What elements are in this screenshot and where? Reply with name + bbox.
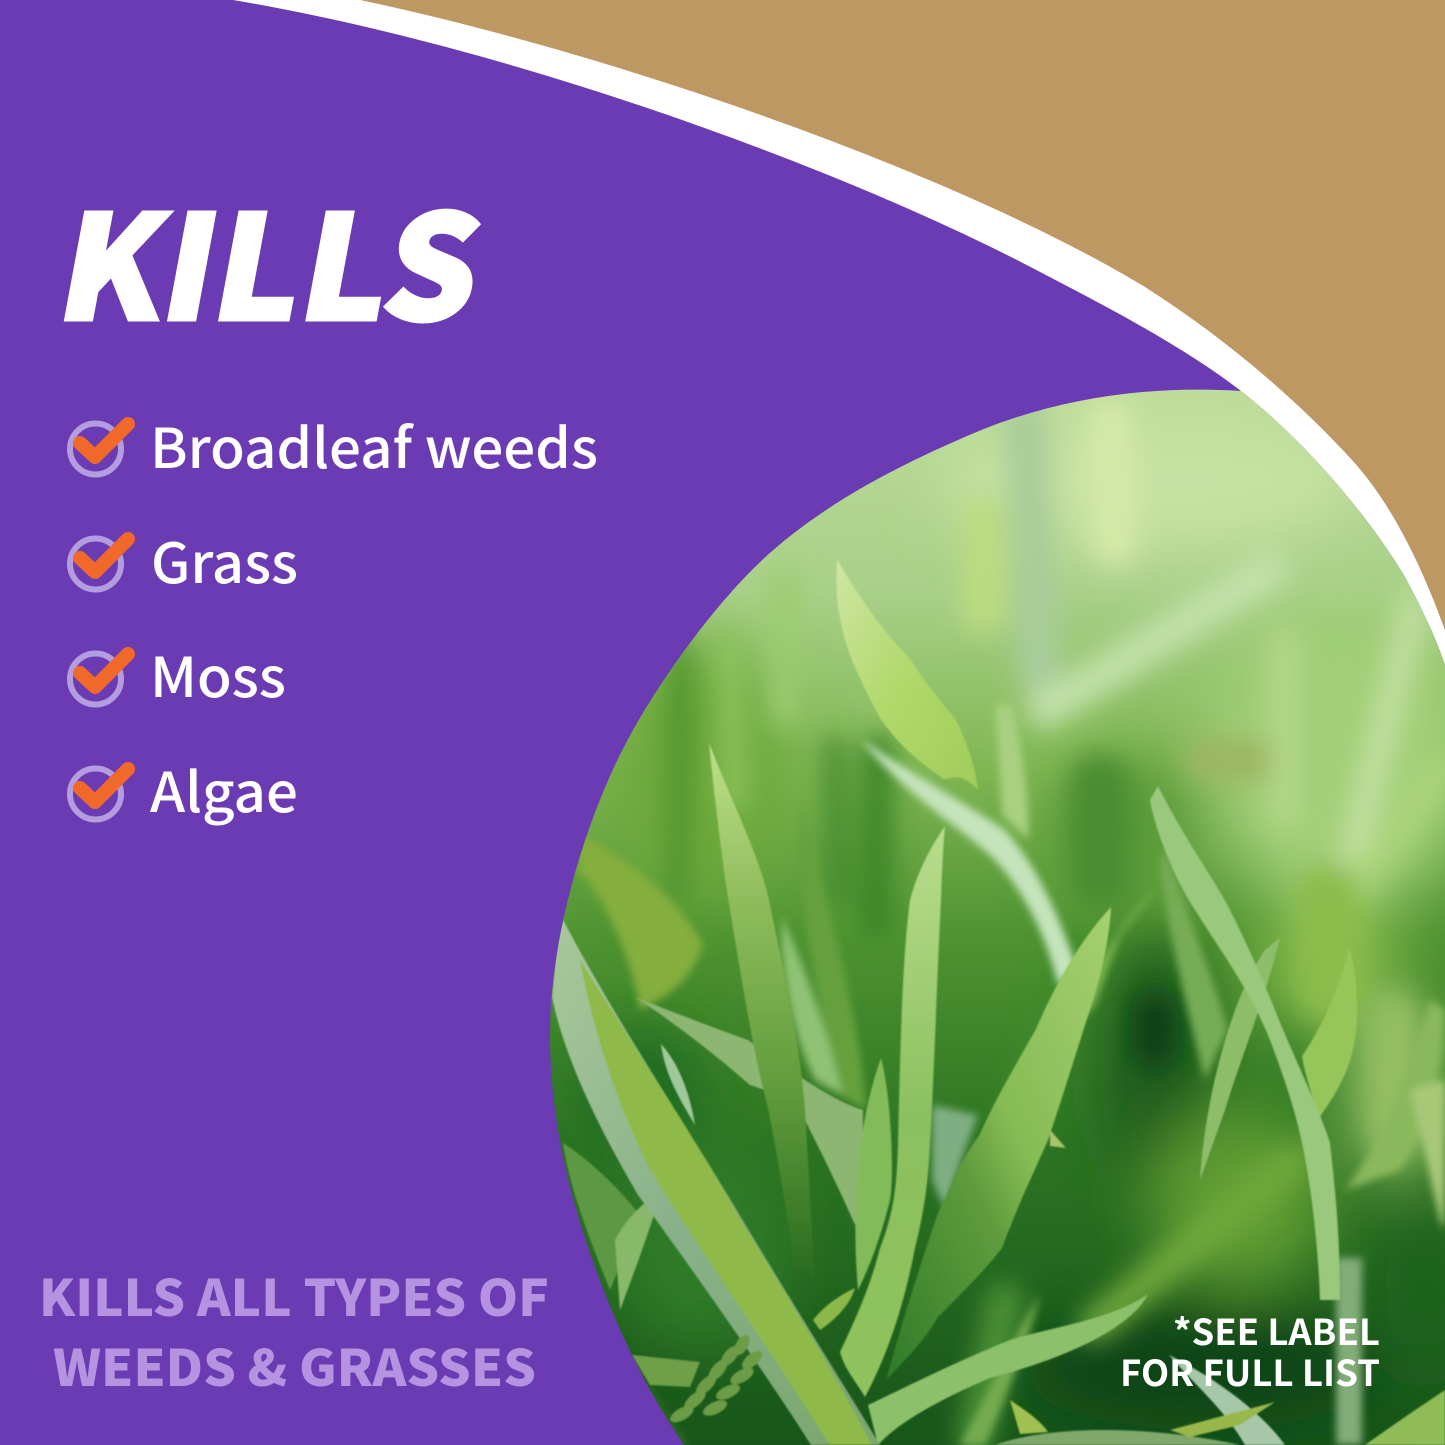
- blade thin E: [1150, 786, 1340, 1300]
- seed head: [632, 1332, 765, 1426]
- item: grass: Grass: [151, 519, 298, 599]
- small left blades: [563, 1143, 640, 1290]
- blade small right: [1302, 947, 1357, 1118]
- white swoosh band: [233, 0, 1445, 665]
- item: broadleaf weeds: Broadleaf weeds: [150, 404, 598, 484]
- item: algae: [70, 748, 298, 828]
- grass photo circle: [540, 380, 1445, 1445]
- tagline: [39, 1259, 549, 1401]
- tagline: KILLS ALL TYPES OF: [39, 1259, 549, 1331]
- blade wide D: [886, 907, 1111, 1380]
- blurred background streaks: [678, 420, 1440, 1440]
- blade lower left: [635, 997, 863, 1225]
- footnote: FOR FULL LIST: [1120, 1345, 1380, 1397]
- blade curved bottom: [868, 1294, 1148, 1445]
- blade big A inner strip: [580, 960, 872, 1445]
- blade tall B: [709, 743, 815, 1285]
- footnote: [1120, 1304, 1380, 1397]
- checklist: [70, 404, 598, 828]
- blade bottom right: [1169, 1355, 1285, 1445]
- large soft colour zones: [580, 410, 1445, 1430]
- blade D tip: [1050, 1130, 1066, 1148]
- blade centre back: [855, 1058, 892, 1290]
- blade upper tip: [836, 559, 978, 790]
- thin blade low left: [661, 1044, 695, 1125]
- blade thin behind E: [1200, 938, 1280, 1180]
- item: grass: [70, 519, 298, 599]
- title: KILLS: [45, 152, 501, 363]
- blade tall C: [840, 826, 945, 1397]
- tan corner panel: [360, 0, 1445, 630]
- item: moss: Moss: [150, 633, 286, 713]
- bud: [813, 1288, 855, 1330]
- blade big A: [552, 914, 880, 1445]
- footnote: *SEE LABEL: [1173, 1304, 1380, 1356]
- item: algae: Algae: [150, 748, 298, 828]
- mid-focus blades: [578, 705, 1445, 1445]
- item: moss: [70, 633, 286, 713]
- tagline: WEEDS & GRASSES: [53, 1329, 536, 1401]
- sharp foreground blades: [552, 559, 1445, 1445]
